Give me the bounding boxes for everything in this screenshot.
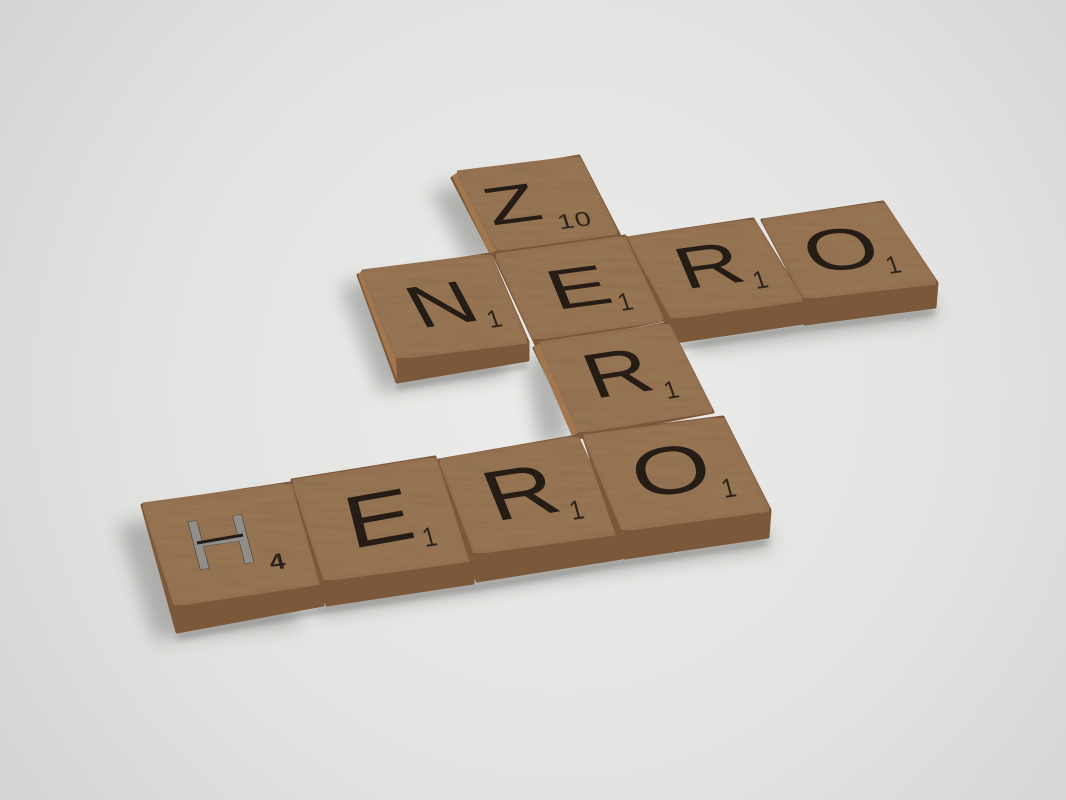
soft tile shadows [118,175,935,640]
tile: O in zero [762,202,937,324]
tile: O in hero [583,417,770,558]
tile: H: H [176,499,266,586]
tile: Z: 10 [554,207,596,234]
tile: R in hero [439,436,622,581]
tile: R in centre: 1 [660,377,683,405]
tile: R in hero: 1 [566,496,587,526]
tile: E in zero [494,236,665,345]
tile: O in zero: 1 [882,252,905,280]
contact shadow under tiles [177,309,935,640]
tile: E in hero: 1 [419,523,440,553]
tile: R in hero: R [470,449,571,536]
tile: N [358,254,528,382]
tile: H [142,483,323,632]
tile: O in zero: O [791,213,890,286]
tile: R in zero: R [664,230,754,302]
tile: R in centre: R [571,334,663,412]
tile: Z: Z [473,171,550,237]
tile: H: 4 [266,549,288,575]
tile: O in hero: O [622,428,720,513]
tile: R in zero: 1 [749,267,772,295]
tile: E in zero: E [536,253,621,322]
tile: E in hero [292,457,473,605]
tile: Z [452,156,620,255]
tile: E in zero: 1 [614,289,637,317]
tile: N: N [393,269,491,341]
tile: R in centre [534,323,713,438]
tile: R in zero [627,219,803,342]
tile: N: 1 [483,306,506,334]
tile: E in hero: E [335,472,422,564]
tile: O in hero: 1 [718,474,739,504]
